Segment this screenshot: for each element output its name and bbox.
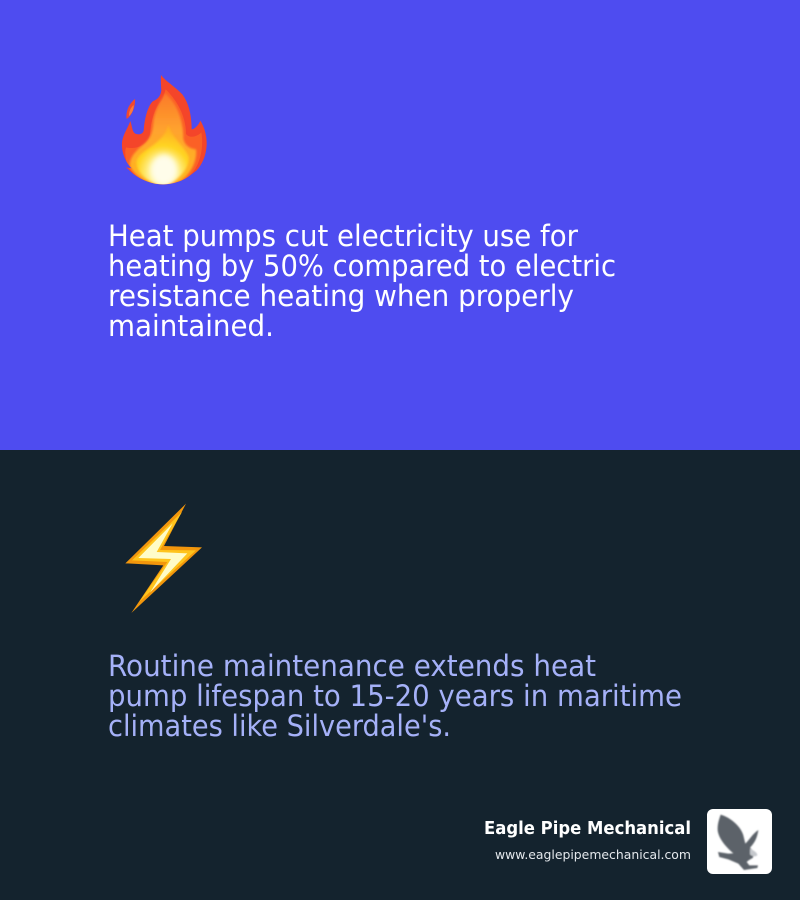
text: maintenance statement: pump lifespan to 15-20 years in maritime bbox=[108, 679, 682, 713]
panel: maintenance lifespan bbox=[0, 450, 800, 900]
brand name: Eagle Pipe Mechanical bbox=[484, 818, 691, 839]
logo: eagle bbox=[707, 809, 772, 874]
text: maintenance statement bbox=[108, 649, 682, 743]
text: heat pump statement: heating by 50% compared to electric bbox=[108, 249, 616, 283]
text: heat pump statement: Heat pumps cut electricity use for bbox=[108, 219, 578, 253]
text: heat pump statement: maintained. bbox=[108, 309, 274, 343]
text: maintenance statement: climates like Silverdale's. bbox=[108, 709, 451, 743]
text: heat pump statement: resistance heating when properly bbox=[108, 279, 574, 313]
website address: www.eaglepipemechanical.com bbox=[495, 847, 691, 862]
panel: heat pump savings bbox=[0, 0, 800, 450]
icon: lightning bolt bbox=[125, 504, 202, 613]
text: maintenance statement: Routine maintenance extends heat bbox=[108, 649, 596, 683]
text: heat pump statement bbox=[108, 219, 616, 343]
icon: fire bbox=[122, 75, 207, 185]
